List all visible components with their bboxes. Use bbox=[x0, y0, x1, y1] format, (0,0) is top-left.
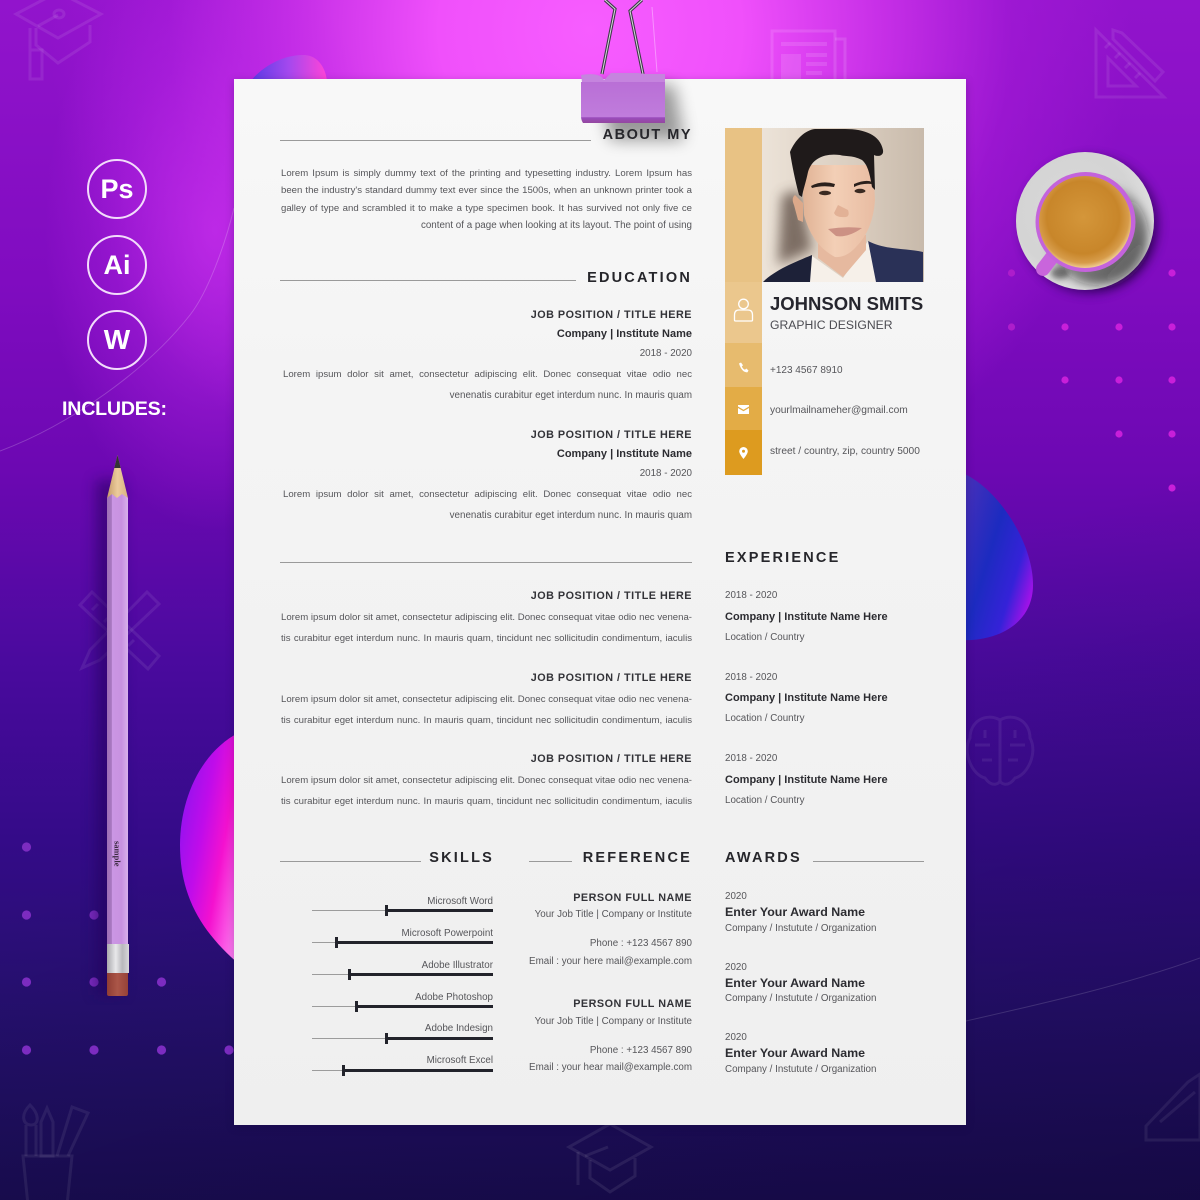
skill: Adobe Indesign: Adobe Indesign bbox=[425, 1023, 493, 1034]
job entry 2: JOB POSITION / TITLE HERE bbox=[531, 672, 692, 684]
reference person 1: PERSON FULL NAME bbox=[573, 892, 692, 904]
experience entry 1 bbox=[725, 590, 888, 643]
icon: Word badge bbox=[87, 310, 147, 370]
section: about bbox=[280, 127, 692, 231]
icon: Illustrator badge: Ai bbox=[104, 250, 130, 280]
experience entry 3 bbox=[725, 753, 888, 806]
about text: galley of type and scrambled it to make a type specimen book. It has survived not only five ce bbox=[281, 203, 692, 214]
icon: phone bbox=[739, 362, 748, 372]
award 1: Company / Instutute / Organization bbox=[725, 923, 876, 934]
education entry 1: Company | Institute Name bbox=[557, 328, 692, 340]
job role: GRAPHIC DESIGNER bbox=[770, 318, 893, 332]
includes label: INCLUDES: bbox=[62, 398, 167, 420]
experience entry 1: Company | Institute Name Here bbox=[725, 611, 888, 623]
education entry 2: JOB POSITION / TITLE HERE bbox=[531, 429, 692, 441]
section: job history bbox=[280, 562, 692, 807]
pencil bbox=[90, 455, 129, 996]
icon: Illustrator badge bbox=[87, 235, 147, 295]
reference heading: REFERENCE bbox=[583, 850, 692, 866]
education entry 1 bbox=[283, 309, 692, 401]
section: experience bbox=[725, 550, 888, 806]
icon: Photoshop badge bbox=[87, 159, 147, 219]
education entry 1: Lorem ipsum dolor sit amet, consectetur adipiscing elit. Donec consequat vitae odio nec bbox=[283, 369, 692, 380]
skill: Microsoft Excel: Microsoft Excel bbox=[427, 1055, 493, 1066]
job entry 3: Lorem ipsum dolor sit amet, consectetur adipiscing elit. Donec consequat vitae odio nec venena- bbox=[281, 775, 692, 786]
education entry 2: Company | Institute Name bbox=[557, 448, 692, 460]
decorative dots, left bbox=[22, 842, 234, 1055]
pencil brand text: sample bbox=[112, 841, 122, 867]
experience entry 2: Company | Institute Name Here bbox=[725, 692, 888, 704]
education entry 1: JOB POSITION / TITLE HERE bbox=[531, 309, 692, 321]
icon: Photoshop badge: Ps bbox=[100, 174, 134, 204]
binder clip bbox=[581, 0, 692, 150]
icon: Word badge: W bbox=[104, 324, 130, 355]
portrait photo bbox=[762, 128, 924, 282]
about text: been the industry's standard dummy text ever since the 1500s, when an unknown printer took a bbox=[281, 185, 692, 196]
experience entry 2: Location / Country bbox=[725, 713, 805, 724]
icon: person bbox=[734, 298, 754, 322]
experience entry 3: 2018 - 2020 bbox=[725, 753, 777, 764]
about text bbox=[281, 168, 692, 231]
award 1: Enter Your Award Name bbox=[725, 905, 865, 919]
gradient blobs behind the paper bbox=[180, 55, 1033, 960]
job entry 1: tis curabitur eget interdum nunc. In mauris quam, tincidunt nec sollicitudin condimentum, iaculis bbox=[281, 633, 692, 644]
section: awards bbox=[725, 847, 924, 1079]
skill: Microsoft Powerpoint: Microsoft Powerpoint bbox=[402, 928, 493, 939]
education entry 2: Lorem ipsum dolor sit amet, consectetur adipiscing elit. Donec consequat vitae odio nec bbox=[283, 489, 692, 500]
job entry 2 bbox=[281, 672, 692, 726]
job entry 1 bbox=[281, 590, 692, 644]
skill: Microsoft Word bbox=[312, 896, 493, 916]
about divider and heading: ABOUT MY bbox=[603, 127, 692, 143]
reference person 2 bbox=[529, 998, 692, 1073]
name: JOHNSON SMITS bbox=[770, 293, 923, 314]
award 1: 2020 bbox=[725, 891, 747, 902]
education heading: EDUCATION bbox=[587, 270, 692, 286]
section: education bbox=[280, 270, 692, 521]
section: reference bbox=[529, 850, 692, 1073]
about text: Lorem Ipsum is simply dummy text of the printing and typesetting industry. Lorem Ipsum has bbox=[281, 168, 692, 179]
award 2: Enter Your Award Name bbox=[725, 976, 865, 990]
email address: yourlmailnameher@gmail.com bbox=[770, 405, 908, 416]
icon: envelope bbox=[738, 405, 749, 414]
job entry 1: JOB POSITION / TITLE HERE bbox=[531, 590, 692, 602]
section: skills bbox=[280, 850, 494, 1076]
experience entry 1: 2018 - 2020 bbox=[725, 590, 777, 601]
street address: street / country, zip, country 5000 bbox=[770, 446, 920, 457]
paper bbox=[234, 79, 966, 1125]
phone number: +123 4567 8910 bbox=[770, 365, 843, 376]
experience entry 2 bbox=[725, 672, 888, 724]
job entry 2: tis curabitur eget interdum nunc. In mauris quam, tincidunt nec sollicitudin condimentum, iaculis bbox=[281, 715, 692, 726]
skill: Microsoft Powerpoint bbox=[312, 928, 493, 948]
decorative dots, right bbox=[1008, 269, 1176, 492]
award 3 bbox=[725, 1027, 924, 1079]
icon: location pin bbox=[739, 447, 748, 459]
award 3: Company / Instutute / Organization bbox=[725, 1064, 876, 1075]
award 3: 2020 bbox=[725, 1032, 747, 1043]
skill: Adobe Photoshop: Adobe Photoshop bbox=[415, 992, 493, 1003]
reference person 2: Email : your hear mail@example.com bbox=[529, 1062, 692, 1073]
job entry 3 bbox=[281, 753, 692, 807]
skill: Microsoft Excel bbox=[312, 1055, 493, 1076]
award 1 bbox=[725, 886, 924, 938]
award 2: Company / Instutute / Organization bbox=[725, 993, 876, 1004]
education entry 2 bbox=[283, 429, 692, 521]
skill: Microsoft Word: Microsoft Word bbox=[427, 896, 493, 907]
education entry 2: venenatis curabitur eget interdum nunc. In mauris quam bbox=[450, 510, 692, 521]
award 2 bbox=[725, 957, 924, 1009]
award 3: Enter Your Award Name bbox=[725, 1046, 865, 1060]
reference person 2: Your Job Title | Company or Institute bbox=[535, 1016, 692, 1027]
reference person 2: Phone : +123 4567 890 bbox=[590, 1045, 692, 1056]
colour sidebar bbox=[725, 128, 762, 475]
profile panel bbox=[725, 128, 924, 475]
job entry 2: Lorem ipsum dolor sit amet, consectetur adipiscing elit. Donec consequat vitae odio nec venena- bbox=[281, 694, 692, 705]
experience heading: EXPERIENCE bbox=[725, 550, 840, 566]
skill: Adobe Illustrator bbox=[312, 960, 493, 980]
job entry 3: JOB POSITION / TITLE HERE bbox=[531, 753, 692, 765]
reference person 1 bbox=[529, 892, 692, 967]
education entry 2: 2018 - 2020 bbox=[640, 468, 692, 479]
awards heading: AWARDS bbox=[725, 850, 802, 866]
experience entry 3: Location / Country bbox=[725, 795, 805, 806]
about text: content of a page when looking at its layout. The point of using bbox=[421, 220, 692, 231]
reference person 1: Your Job Title | Company or Institute bbox=[535, 909, 692, 920]
education entry 1: 2018 - 2020 bbox=[640, 348, 692, 359]
job entry 3: tis curabitur eget interdum nunc. In mauris quam, tincidunt nec sollicitudin condimentum, iaculis bbox=[281, 796, 692, 807]
skill: Adobe Illustrator: Adobe Illustrator bbox=[422, 960, 493, 971]
reference person 1: Phone : +123 4567 890 bbox=[590, 938, 692, 949]
award 2: 2020 bbox=[725, 962, 747, 973]
experience entry 1: Location / Country bbox=[725, 632, 805, 643]
reference person 1: Email : your here mail@example.com bbox=[529, 956, 692, 967]
reference person 2: PERSON FULL NAME bbox=[573, 998, 692, 1010]
skill: Adobe Indesign bbox=[312, 1023, 493, 1044]
skills heading: SKILLS bbox=[429, 850, 494, 866]
skill: Adobe Photoshop bbox=[312, 992, 493, 1012]
job entry 1: Lorem ipsum dolor sit amet, consectetur adipiscing elit. Donec consequat vitae odio nec venena- bbox=[281, 612, 692, 623]
experience entry 2: 2018 - 2020 bbox=[725, 672, 777, 683]
education entry 1: venenatis curabitur eget interdum nunc. In mauris quam bbox=[450, 390, 692, 401]
coffee cup bbox=[1016, 150, 1164, 300]
experience entry 3: Company | Institute Name Here bbox=[725, 774, 888, 786]
